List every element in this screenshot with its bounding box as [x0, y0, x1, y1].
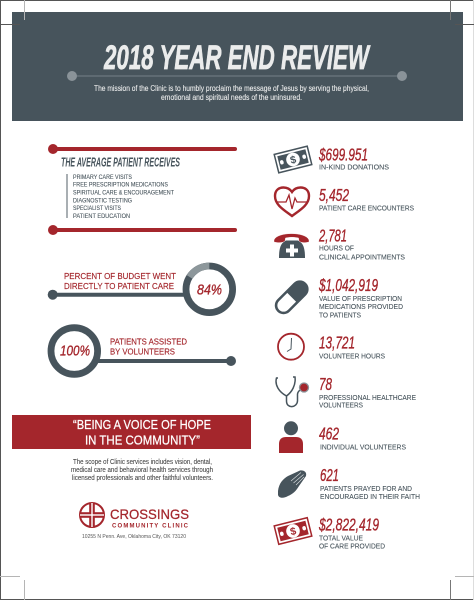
stat: in-kind donations: IN-KIND DONATIONS: [319, 163, 389, 172]
panel: average patient receives: [48, 144, 235, 235]
stat: in-kind donations: $699.951: [318, 144, 368, 164]
stat: total value of care: TOTAL VALUE: [319, 533, 363, 542]
mission statement: emotional and spiritual needs of the uninsured.: [161, 93, 302, 102]
heading: average patient: THE AVERAGE PATIENT RECEIVES: [61, 156, 180, 170]
chart: 100 percent volunteers: [51, 328, 236, 374]
icon: telephone: [274, 234, 309, 258]
stat: prescription medications: TO PATIENTS: [319, 311, 361, 320]
callout: voice of hope: [12, 415, 251, 449]
stat: clinical appointments: HOURS OF: [319, 244, 354, 253]
chart: 100 percent volunteers: PATIENTS ASSISTED: [110, 337, 187, 347]
stat: clinical appointments: CLINICAL APPOINTMENTS: [319, 252, 405, 261]
icon: dollar bill: [274, 146, 312, 173]
stat: total value of care: [318, 514, 385, 551]
stat: patients prayed for: [320, 465, 420, 501]
stat: total value of care: OF CARE PROVIDED: [319, 542, 385, 551]
stat: patients prayed for: ENCOURAGED IN THEIR FAITH: [320, 492, 420, 501]
list of services: SPECIALIST VISITS: [73, 205, 121, 212]
stat: volunteer hours: VOLUNTEER HOURS: [319, 351, 385, 360]
stat: volunteer hours: [319, 332, 385, 360]
stat: clinical appointments: [318, 226, 405, 261]
stat: prescription medications: MEDICATIONS PROVIDED: [319, 302, 403, 311]
chart: 100 percent volunteers: BY VOLUNTEERS: [110, 347, 175, 357]
mission statement: The mission of the Clinic is to humbly proclaim the message of Jesus by serving the physical,: [94, 84, 369, 93]
stat: patient care encounters: PATIENT CARE ENCOUNTERS: [319, 204, 414, 213]
stat: patients prayed for: 621: [320, 465, 339, 485]
text block: scope of services: The scope of Clinic services includes vision, dental,: [73, 459, 212, 466]
title divider: [67, 71, 407, 81]
stat: individual volunteers: 462: [319, 423, 339, 443]
icon: red dollar bill: [274, 518, 312, 544]
mission statement: [94, 84, 369, 102]
chart: 84 percent of budget: [48, 266, 233, 313]
callout: voice of hope: IN THE COMMUNITY”: [85, 432, 200, 448]
list of services: FREE PRESCRIPTION MEDICATIONS: [73, 182, 168, 188]
panel: header: [12, 12, 463, 121]
chart: 100 percent volunteers: 100%: [60, 342, 90, 360]
icon: stethoscope: [276, 377, 308, 407]
stat: clinical appointments: 2,781: [318, 226, 347, 246]
list of services: [73, 174, 174, 220]
logo: crossings community clinic: CROSSINGS: [110, 506, 189, 522]
icon: clock: [278, 334, 304, 360]
chart: 84 percent of budget: 84%: [197, 282, 222, 298]
list of services: DIAGNOSTIC TESTING: [73, 197, 132, 204]
icon: praying hands: [278, 470, 306, 498]
chart: 84 percent of budget: PERCENT OF BUDGET WENT: [64, 271, 177, 281]
icon: dollar bill: $: [289, 154, 298, 167]
stat: patient care encounters: [319, 185, 414, 213]
stat: prescription medications: VALUE OF PRESCRIPTION: [319, 294, 402, 303]
stat: healthcare volunteers: PROFESSIONAL HEALTHCARE: [319, 393, 416, 402]
text block: scope of services: licensed professionals and other faithful volunteers.: [72, 475, 213, 482]
stat: individual volunteers: [319, 423, 406, 452]
stat: healthcare volunteers: 78: [319, 374, 332, 394]
stat: healthcare volunteers: VOLUNTEERS: [319, 401, 363, 410]
stat: individual volunteers: INDIVIDUAL VOLUNTEERS: [320, 443, 406, 452]
list of services: SPIRITUAL CARE & ENCOURAGEMENT: [73, 190, 174, 196]
icon: red dollar bill: $: [289, 525, 298, 538]
text block: scope of services: [71, 459, 213, 482]
stat: volunteer hours: 13,721: [319, 332, 355, 352]
icon: pill: [273, 279, 310, 316]
stat: prescription medications: $1,042,919: [318, 275, 378, 295]
logo: crossings community clinic: 10255 N Penn. Ave, Oklahoma City, OK 73120: [82, 534, 186, 540]
stat: prescription medications: [318, 275, 403, 320]
list of services: PATIENT EDUCATION: [73, 213, 130, 220]
logo: crossings community clinic: [80, 503, 189, 540]
list of services: PRIMARY CARE VISITS: [73, 174, 132, 181]
stat: patient care encounters: 5,452: [319, 185, 349, 205]
callout: voice of hope: “BEING A VOICE OF HOPE: [73, 417, 211, 432]
text block: scope of services: medical care and behavioral health services through: [71, 467, 213, 474]
icon: heart: [275, 188, 309, 216]
logo: crossings community clinic: COMMUNITY CLINIC: [112, 524, 189, 530]
stat: patients prayed for: PATIENTS PRAYED FOR AND: [320, 484, 412, 493]
chart: 84 percent of budget: DIRECTLY TO PATIENT CARE: [64, 281, 174, 291]
stat: total value of care: $2,822,419: [318, 514, 379, 534]
stat: healthcare volunteers: [319, 374, 416, 410]
icon: person: [279, 421, 303, 453]
